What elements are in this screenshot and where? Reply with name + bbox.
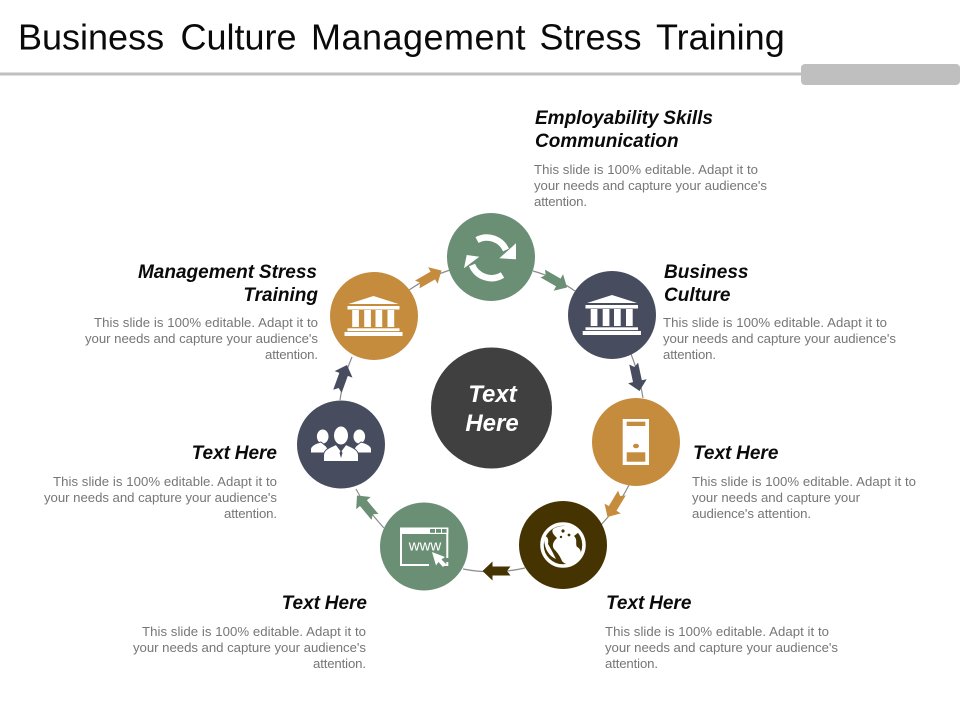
icon: bank building (583, 295, 641, 335)
node: team (297, 400, 385, 488)
text block: management stress training: attention. (265, 347, 318, 362)
text block: lower right: your needs and capture your audience's (605, 640, 838, 655)
arrow: brown to green (482, 562, 510, 580)
node: www (380, 502, 468, 590)
arrow: navy to orange (624, 362, 649, 393)
center circle: Text (468, 381, 518, 408)
text block: lower right: Text Here (606, 593, 692, 614)
node: business culture (568, 271, 656, 359)
text block: right middle: Text Here (693, 443, 779, 464)
text block: employability skills communication: This slide is 100% editable. Adapt it to (534, 162, 758, 177)
text block: lower right: This slide is 100% editable. Adapt it to (605, 624, 829, 639)
arrow: orange to green (413, 262, 446, 293)
text block: right middle: This slide is 100% editable. Adapt it to (692, 474, 916, 489)
text block: employability skills communication: your needs and capture your audience's (534, 178, 767, 193)
arrow: green to navy (538, 265, 572, 296)
text block: right middle (692, 443, 916, 521)
title (18, 16, 785, 58)
text block: lower right: attention. (605, 656, 658, 671)
icon: refresh arrows (464, 238, 516, 278)
center circle: Here (465, 410, 519, 437)
arrow: green to navy lower left (350, 489, 382, 523)
node: server (592, 398, 680, 486)
arrow: navy to orange left (328, 362, 356, 395)
text block: left middle: This slide is 100% editable. Adapt it to (53, 474, 277, 489)
title: Culture (180, 16, 297, 58)
icon: server tower (623, 419, 649, 465)
header rule and tab (0, 64, 960, 85)
text block: management stress training: Training (243, 285, 318, 306)
text block: left middle: attention. (224, 506, 277, 521)
arrow: orange to brown (599, 488, 630, 522)
text block: lower left: your needs and capture your audience's (133, 640, 366, 655)
title: Stress (540, 16, 642, 58)
text block: management stress training: Management Stress (138, 262, 317, 283)
icon: globe (542, 524, 584, 566)
text block: business culture: Business (664, 262, 748, 283)
text block: right middle: audience's attention. (692, 506, 811, 521)
text block: left middle: Text Here (192, 443, 277, 464)
text block: lower left: This slide is 100% editable. Adapt it to (142, 624, 366, 639)
icon: people group (310, 426, 372, 462)
node: management (330, 272, 418, 360)
text block: employability skills communication: attention. (534, 194, 587, 209)
text block: lower right (605, 593, 838, 671)
text block: business culture: attention. (663, 347, 716, 362)
text block: management stress training (85, 262, 318, 362)
icon: browser window: www (408, 538, 441, 554)
title: Business (18, 16, 164, 58)
text block: left middle: your needs and capture your audience's (44, 490, 277, 505)
text block: employability skills communication (534, 108, 767, 209)
text block: management stress training: This slide is 100% editable. Adapt it to (94, 315, 318, 330)
text block: business culture (663, 262, 896, 362)
text block: business culture: Culture (664, 285, 731, 306)
center circle (431, 348, 552, 468)
text block: employability skills communication: Employability Skills (535, 108, 713, 129)
title: Training (656, 16, 785, 58)
text block: lower left: Text Here (282, 593, 367, 614)
text block: lower left (133, 593, 367, 671)
text block: left middle (44, 443, 277, 521)
text block: business culture: This slide is 100% editable. Adapt it to (663, 315, 887, 330)
text block: business culture: your needs and capture your audience's (663, 331, 896, 346)
node: globe (519, 501, 607, 589)
connector lines (340, 270, 643, 572)
text block: right middle: your needs and capture your (692, 490, 861, 505)
text block: management stress training: your needs and capture your audience's (85, 331, 318, 346)
node: refresh (447, 213, 535, 301)
title: Management (311, 16, 526, 58)
text block: employability skills communication: Communication (535, 131, 679, 152)
text block: lower left: attention. (313, 656, 366, 671)
icon: bank building (344, 296, 402, 336)
